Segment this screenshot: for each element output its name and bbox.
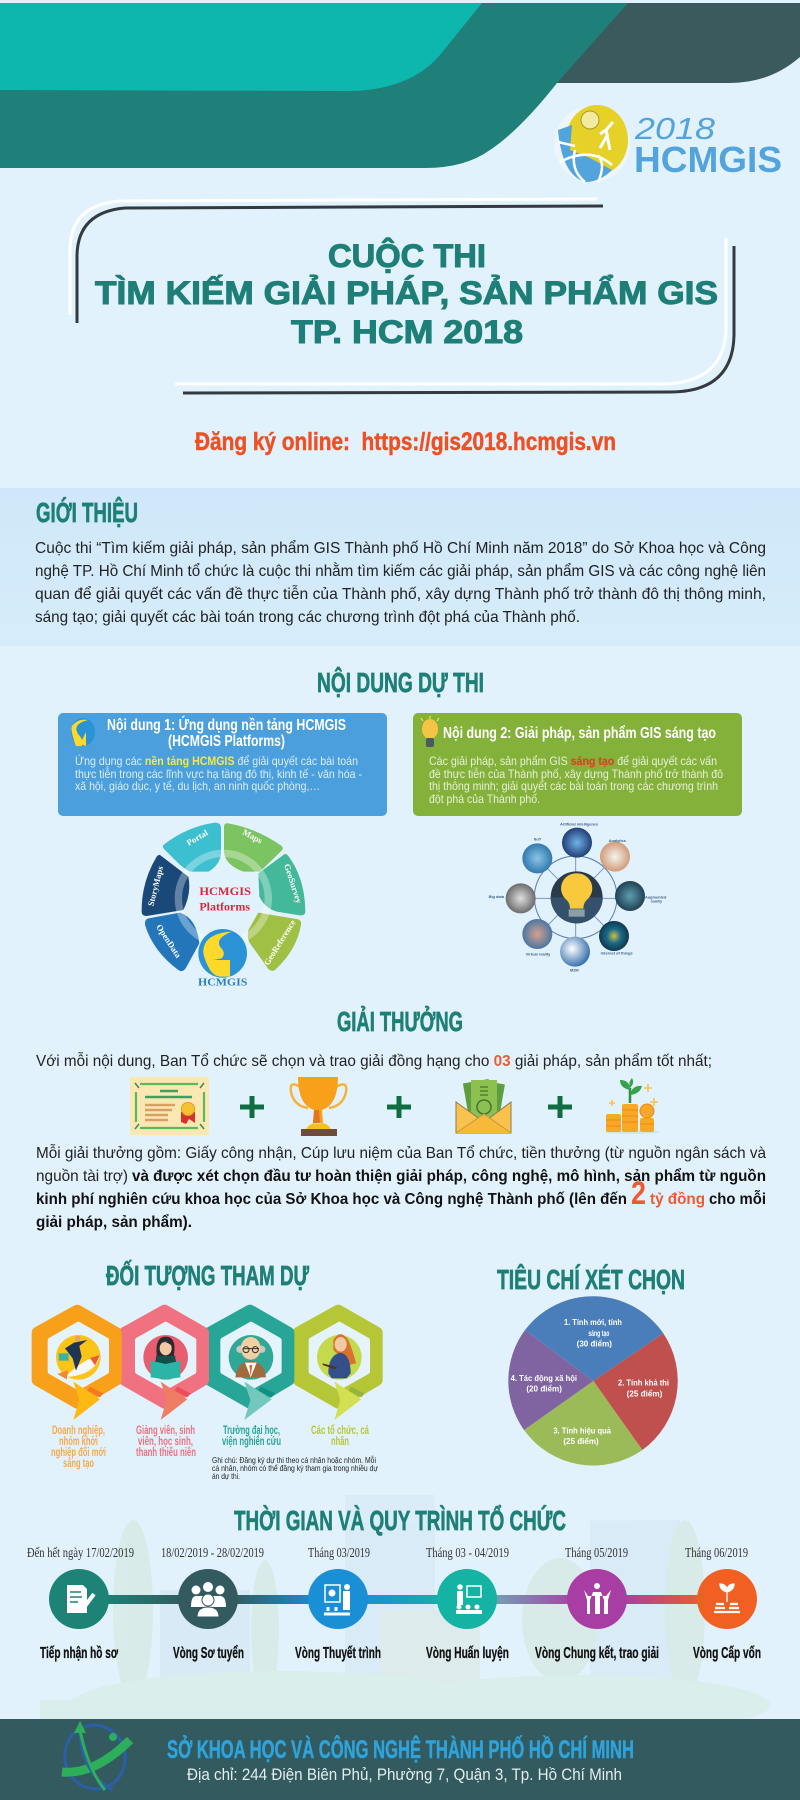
chart: innovation technologies wheel: M2M (570, 969, 579, 973)
prize description text: và được xét chọn đầu tư hoàn thiện giải pháp, công nghệ, mô hình, sản phẩm từ nguồn (132, 1167, 766, 1185)
intro text: quan để giải quyết các vấn đề thực tiễn của Thành phố, xây dựng Thành phố trở thành đô thị thông minh, (35, 584, 766, 603)
title: TP. HCM 2018 (291, 314, 523, 350)
chart: innovation technologies wheel (489, 823, 666, 973)
node: vòng cấp vốn (697, 1569, 757, 1629)
top decorative banner (0, 3, 800, 168)
timeline stage labels: Vòng Chung kết, trao giải (535, 1645, 659, 1662)
intro text: nghệ TP. Hồ Chí Minh tổ chức là cuộc thi nhằm tìm kiếm các giải pháp, sản phẩm GIS và các công nghệ liên (35, 561, 766, 580)
chart: evaluation criteria pie: sáng tạo (588, 1328, 609, 1338)
chart: innovation technologies wheel: Virtual reality (526, 953, 551, 957)
timeline stage labels (40, 1644, 761, 1662)
panel: nội dung 2: Nội dung 2: Giải pháp, sản phẩm GIS sáng tạo (443, 724, 716, 742)
timeline stage labels: Tiếp nhận hồ sơ (40, 1645, 118, 1662)
logo text 2018: 2018 (634, 111, 716, 146)
icon: money envelope (456, 1079, 511, 1133)
intro text (35, 539, 766, 626)
chart: innovation technologies wheel: reality (651, 900, 662, 904)
chart: hcmgis platforms wheel: HCMGIS (198, 978, 248, 989)
timeline stage labels: Vòng Thuyết trình (295, 1645, 381, 1662)
chart: evaluation criteria pie: (25 điểm) (563, 1436, 599, 1446)
icon: hcmgis logo (71, 718, 95, 746)
participant labels: viện nghiên cứu (222, 1434, 281, 1448)
chart: hcmgis platforms wheel: HCMGIS (199, 885, 251, 898)
note text: cá nhân, nhóm có thể đăng ký tham gia trong nhiều dự (212, 1463, 378, 1473)
panel: nội dung 2: đề thực tiễn của Thành phố, xây dựng Thành phố trở thành đô (429, 766, 723, 781)
heading: giới thiệu: GIỚI THIỆU (36, 497, 138, 528)
chart: innovation technologies wheel: Artificial intelligence (560, 823, 598, 827)
panel: nội dung 2: Các giải pháp, sản phẩm GIS sáng tạo để giải quyết các vấn (429, 754, 717, 768)
participant labels: nghiệp đổi mới (51, 1445, 106, 1459)
prize description text: Mỗi giải thưởng gồm: Giấy công nhận, Cúp lưu niệm của Ban Tổ chức, tiền thưởng (từ nguồn ngân sách và (36, 1143, 766, 1162)
prize description text: nguồn tài trợ) (36, 1168, 128, 1185)
icon: plus (548, 1096, 572, 1118)
heading: nội dung dự thi: NỘI DUNG DỰ THI (317, 666, 484, 698)
prize description text (36, 1143, 766, 1231)
timeline dates: 18/02/2019 - 28/02/2019 (161, 1546, 264, 1561)
icon: trophy (291, 1077, 346, 1136)
logo: 2018 HCMGIS (554, 105, 782, 182)
prize description text: cho mỗi (709, 1189, 766, 1208)
chart: hcmgis platforms wheel: Portal (185, 827, 210, 848)
chart: innovation technologies wheel: Big data (489, 895, 504, 899)
chart: hcmgis platforms wheel (142, 823, 305, 989)
title (95, 238, 718, 350)
participant labels: sáng tạo (63, 1456, 94, 1470)
icon: certificate (130, 1077, 209, 1135)
timeline dates: Đến hết ngày 17/02/2019 (27, 1546, 134, 1561)
chart: evaluation criteria pie: (30 điểm) (577, 1339, 612, 1349)
panel: nội dung 1: xã hội, giáo dục, y tế, du lịch, an ninh quốc phòng,… (75, 779, 320, 793)
footer address: Địa chỉ: 244 Điện Biên Phủ, Phường 7, Quận 3, Tp. Hồ Chí Minh (187, 1765, 622, 1784)
node: vòng huấn luyện (437, 1569, 497, 1629)
timeline stage labels: Vòng Sơ tuyển (173, 1644, 244, 1662)
participant labels (51, 1423, 369, 1470)
intro text: Cuộc thi “Tìm kiếm giải pháp, sản phẩm GIS Thành phố Hồ Chí Minh năm 2018” do Sở Khoa học và Công (35, 539, 766, 557)
heading: giải thưởng: GIẢI THƯỞNG (337, 1005, 463, 1037)
icon: woman with notebook (317, 1334, 362, 1380)
chart: evaluation criteria pie: 1. Tính mới, tính (564, 1317, 622, 1327)
panel: nội dung 2: đột phá của Thành phố. (429, 792, 540, 806)
icon: entrepreneur on rocket (56, 1335, 101, 1380)
chart: hcmgis platforms wheel: StoryMaps (146, 864, 165, 907)
panel: participant hexagons (38, 1311, 377, 1420)
panel: nội dung 1: Nội dung 1: Ứng dụng nền tảng HCMGIS (107, 715, 346, 734)
prize description text: giải pháp, sản phẩm). (36, 1213, 192, 1231)
chart: innovation technologies wheel: IIoT (534, 837, 541, 841)
chart: evaluation criteria pie: (25 điểm) (627, 1388, 662, 1398)
prize description text: kinh phí nghiên cứu khoa học của Sở Khoa học và Công nghệ Thành phố (lên đến (36, 1191, 627, 1208)
participant labels: nhóm khởi (59, 1434, 98, 1448)
node: vòng thuyết trình (308, 1569, 368, 1629)
chart: hcmgis platforms wheel: Platforms (199, 900, 250, 913)
panel: nội dung 1: Ứng dụng các nền tảng HCMGIS để giải quyết các bài toán (75, 753, 358, 768)
heading: tiêu chí xét chọn: TIÊU CHÍ XÉT CHỌN (497, 1264, 685, 1295)
node: vòng chung kết (567, 1569, 627, 1629)
chart: evaluation criteria pie: 2. Tính khả thi (618, 1377, 669, 1387)
panel: nội dung 1 (58, 713, 387, 816)
panel: giới thiệu (0, 488, 800, 646)
intro text: sáng tạo; giải quyết các bài toán trong các chương trình đột phá của Thành phố. (35, 609, 580, 626)
chart: hcmgis platforms wheel: Maps (241, 827, 265, 846)
heading: đối tượng tham dự: ĐỐI TƯỢNG THAM DỰ (106, 1259, 310, 1291)
prize intro text: Với mỗi nội dung, Ban Tổ chức sẽ chọn và trao giải đồng hạng cho 03 giải pháp, sản phẩm tốt nhất; (36, 1051, 712, 1070)
chart: evaluation criteria pie (508, 1296, 678, 1466)
timeline connectors and nodes (49, 1569, 757, 1629)
icon: plus (387, 1096, 411, 1118)
icon: plus (240, 1096, 264, 1118)
prize description text: tỷ đồng (650, 1191, 705, 1208)
participant labels: Giảng viên, sinh (136, 1423, 195, 1437)
chart: evaluation criteria pie: (20 điểm) (526, 1384, 562, 1394)
icon: student reading (143, 1335, 188, 1380)
node: vòng sơ tuyển (178, 1569, 238, 1629)
timeline stage labels: Vòng Cấp vốn (693, 1645, 761, 1662)
participant labels: nhân (331, 1434, 349, 1448)
title: TÌM KIẾM GIẢI PHÁP, SẢN PHẨM GIS (95, 275, 718, 311)
chart: hcmgis platforms wheel: OpenData (154, 922, 184, 960)
participant labels: Trường đại học, (223, 1423, 280, 1437)
title: CUỘC THI (328, 238, 486, 274)
chart: evaluation criteria pie: 3. Tính hiệu quả (553, 1425, 611, 1435)
participant labels: Doanh nghiệp, (52, 1423, 105, 1437)
timeline dates: Tháng 03 - 04/2019 (426, 1546, 509, 1561)
icon: department logo (58, 1718, 132, 1796)
note text (212, 1455, 378, 1481)
timeline dates (27, 1546, 748, 1561)
node: tiếp nhận hồ sơ (49, 1569, 109, 1629)
timeline stage labels: Vòng Huấn luyện (426, 1645, 509, 1662)
panel: nội dung 1: thực tiễn trong các lĩnh vực hạ tầng đô thị, kinh tế - văn hóa - (75, 766, 362, 781)
panel: nội dung 1: (HCMGIS Platforms) (168, 733, 285, 750)
prize description text: 2 (631, 1175, 646, 1211)
chart: innovation technologies wheel: Analytics (609, 839, 626, 843)
heading: thời gian và quy trình tổ chức: THỜI GIAN VÀ QUY TRÌNH TỔ CHỨC (234, 1505, 566, 1536)
background city skyline (40, 1495, 770, 1739)
participant labels: thanh thiếu niên (136, 1445, 196, 1459)
timeline dates: Tháng 06/2019 (685, 1546, 748, 1561)
chart: innovation technologies wheel: Augmented (645, 896, 666, 900)
icon: growing coins (604, 1078, 660, 1134)
note text: án dự thi. (212, 1471, 240, 1481)
chart: evaluation criteria pie: 4. Tác động xã hội (511, 1373, 577, 1383)
chart: hcmgis platforms wheel: GeoSurvey (282, 863, 304, 905)
participant labels: Các tổ chức, cá (311, 1423, 369, 1437)
timeline dates: Tháng 05/2019 (565, 1546, 628, 1561)
registration link: Đăng ký online: https://gis2018.hcmgis.vn (195, 428, 616, 456)
panel: nội dung 2 (413, 713, 742, 816)
title frame (70, 199, 734, 393)
chart: innovation technologies wheel: Internet of things (601, 952, 633, 956)
participant labels: viên, học sinh, (138, 1434, 193, 1448)
panel: nội dung 2: thị thông minh; giải quyết các bài toán trong các chương trình (429, 779, 718, 793)
note text: Ghi chú: Đăng ký dự thi theo cá nhân hoặc nhóm. Mỗi (212, 1455, 376, 1465)
logo text HCMGIS: HCMGIS (634, 139, 782, 180)
timeline dates: Tháng 03/2019 (308, 1546, 370, 1561)
icon: light bulb (421, 716, 439, 747)
footer (0, 1718, 800, 1800)
chart: hcmgis platforms wheel: GeoReference (262, 918, 298, 967)
icon: professor (229, 1335, 273, 1380)
